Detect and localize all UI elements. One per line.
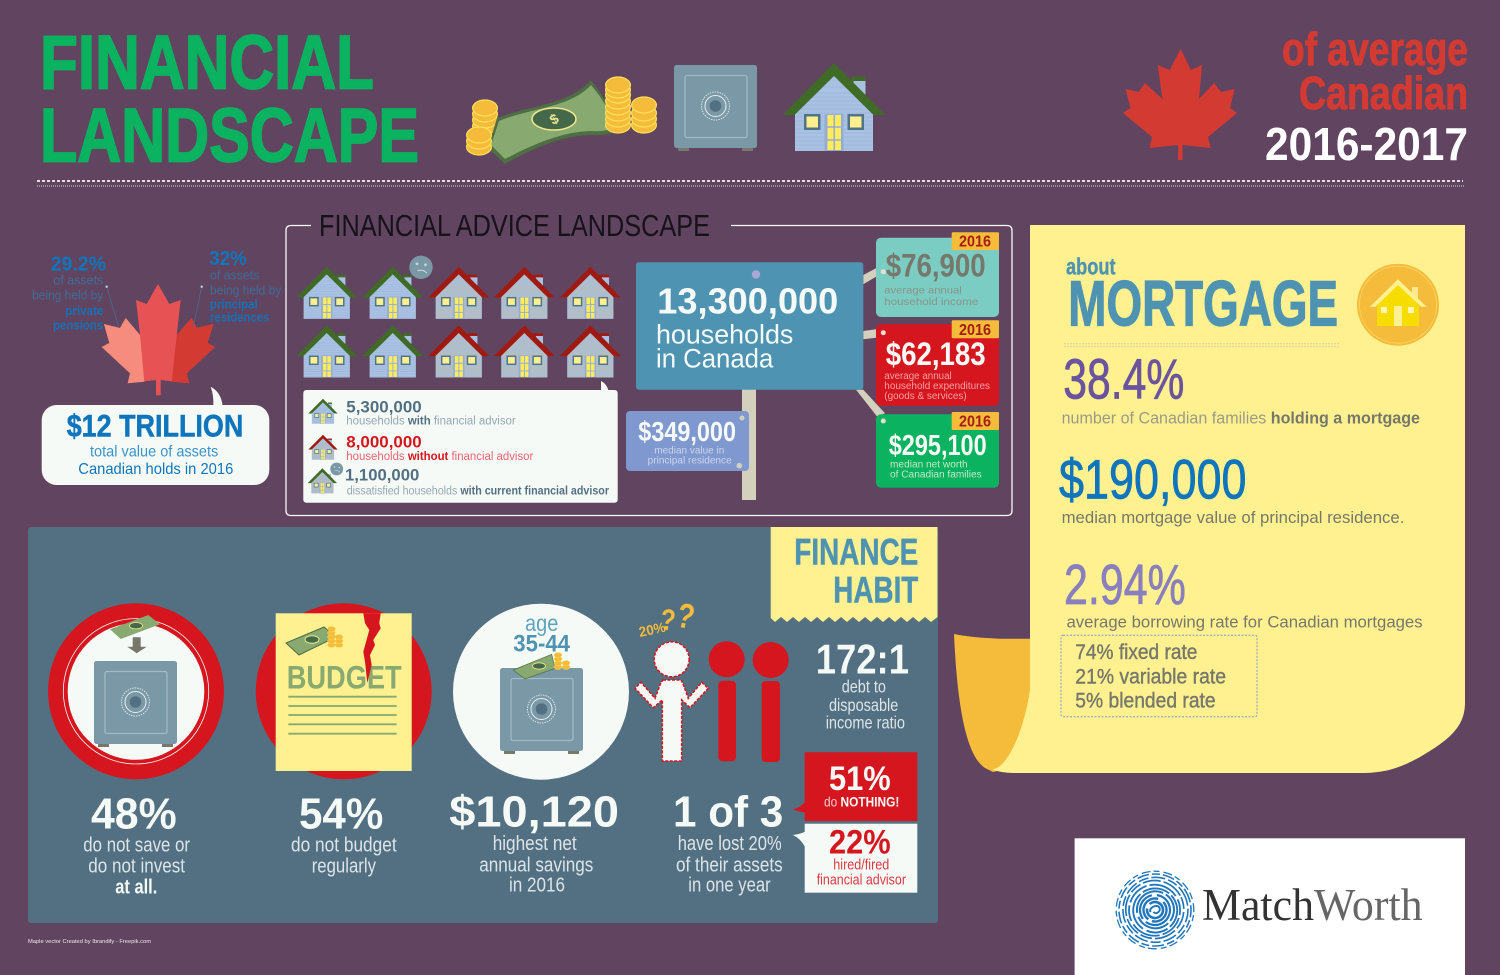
stat: do not budget: do not budget: [291, 835, 397, 857]
stat: private pensions: private: [65, 304, 103, 318]
heading tag: [771, 527, 938, 622]
stat: do not save: [48, 603, 224, 898]
stat: holding a mortgage: [1062, 347, 1420, 427]
sign: households: 13,300,000: [657, 280, 838, 321]
legend card: 8,000,000: [346, 433, 422, 452]
icon: house: [782, 63, 886, 151]
title: FINANCIAL: [40, 20, 374, 106]
sign: household expenditures: (goods & services): [884, 391, 967, 402]
sign: households: in Canada: [656, 344, 774, 374]
stat: do not save: do not save or: [83, 835, 190, 857]
heading tag: FINANCE: [794, 531, 918, 572]
icon: sad face: [409, 256, 433, 279]
stat: median mortgage: [1059, 447, 1404, 527]
stat: private pensions: [32, 254, 106, 332]
sign: net worth: of Canadian families: [890, 469, 982, 480]
panel: financial advice landscape: [286, 208, 1012, 516]
callout: hired or fired: hired/fired: [833, 856, 889, 873]
panel: assets: [32, 248, 282, 485]
callout: hired or fired: financial advisor: [817, 871, 906, 888]
stat: private pensions: being held by: [32, 288, 104, 302]
stat: debt ratio: 172:1: [816, 635, 909, 682]
sign: household expenditures: average annual: [884, 371, 952, 382]
stat: do not budget: BUDGET: [287, 659, 402, 695]
title: LANDSCAPE: [40, 94, 419, 178]
stat: holding a mortgage: number of Canadian families holding a mortgage: [1062, 408, 1420, 427]
icon: three people: [635, 596, 789, 762]
icon: three people: ?: [658, 603, 677, 638]
icon: three people: 20%: [637, 619, 668, 640]
sign: net worth: $295,100: [889, 430, 987, 462]
sign: household income: [876, 232, 999, 317]
stat: debt ratio: disposable: [829, 695, 898, 715]
stat: median mortgage: $190,000: [1059, 447, 1246, 510]
tri-colour maple leaf: [102, 284, 215, 395]
icon: money and coins: $: [547, 110, 562, 128]
callout: do nothing: do NOTHING!: [824, 794, 899, 810]
stat: one of three: [673, 788, 783, 897]
stat: one of three: of their assets: [676, 855, 783, 877]
legend card: dissatisfied households with current financial advisor: [347, 485, 609, 497]
heading: FINANCIAL ADVICE LANDSCAPE: [319, 208, 710, 243]
sign: household expenditures: household expenditures: [884, 381, 990, 392]
callout: 12 trillion: Canadian holds in 2016: [78, 461, 233, 478]
signpost connectors: [742, 268, 885, 500]
stat: do not budget: 54%: [299, 789, 383, 838]
stat: highest net savings: highest net: [493, 833, 577, 855]
rate breakdown box: [1061, 635, 1257, 717]
stat: debt ratio: income ratio: [826, 712, 905, 732]
house grid: [296, 267, 621, 377]
icon: three people: ?: [673, 596, 698, 637]
heading: about: [1066, 253, 1116, 279]
sign: household income: household income: [884, 296, 978, 308]
panel: about mortgage: [954, 225, 1465, 773]
stat: do not save: 48%: [91, 789, 177, 838]
panel: finance habit: [28, 527, 938, 923]
stat: highest net savings: in 2016: [509, 875, 565, 897]
stat: principal residences: [209, 248, 282, 325]
stat: do not budget: [256, 603, 432, 878]
sign: household expenditures: 2016: [959, 322, 991, 339]
callout: 12 trillion: [42, 387, 269, 485]
legend card: households without financial advisor: [346, 451, 533, 463]
logo: MatchWorth: [1075, 838, 1465, 975]
subtitle: [1265, 23, 1468, 170]
sign: net worth: [876, 412, 999, 488]
stat: private pensions: pensions: [53, 318, 103, 332]
sign: household income: average annual: [884, 284, 962, 296]
title: [40, 20, 419, 178]
credit line: Maple vector Created by Ibrandify - Freepik.com: [28, 939, 151, 945]
stat: debt ratio: [816, 635, 909, 732]
callout: hired or fired: 22%: [829, 823, 891, 861]
sign: household income: $76,900: [886, 248, 986, 284]
callout: do nothing: 51%: [829, 760, 891, 798]
callout: 12 trillion: $12 TRILLION: [67, 408, 243, 444]
stat: median mortgage: median mortgage value of principal residence.: [1062, 508, 1404, 527]
sign: net worth: 2016: [959, 413, 991, 430]
sign: household expenditures: $62,183: [886, 336, 986, 372]
stat: debt ratio: debt to: [842, 676, 886, 696]
sign: principal residence value: median value in: [654, 446, 724, 457]
stat: do not budget: regularly: [312, 856, 376, 878]
sign: principal residence value: principal residence: [648, 456, 732, 467]
icon: money and coins: [467, 77, 656, 164]
heading: [1064, 253, 1339, 347]
stat: highest net savings: age: [525, 610, 558, 636]
icon: safe: [674, 65, 757, 151]
icon: red maple leaf: [1123, 49, 1237, 160]
stat: one of three: have lost 20%: [678, 833, 782, 855]
legend card: 1,100,000: [345, 466, 419, 485]
stat: borrowing rate: [1064, 553, 1423, 631]
sign: households: [636, 262, 863, 390]
stat: principal residences: being held by: [210, 283, 282, 297]
stat: principal residences: 32%: [209, 248, 247, 270]
stat: borrowing rate: 2.94%: [1064, 553, 1186, 617]
stat: one of three: in one year: [688, 875, 771, 897]
stat: private pensions: 29.2%: [51, 254, 106, 276]
stat: highest net savings: annual savings: [479, 855, 593, 877]
sign: net worth: median net worth: [890, 459, 968, 470]
sign: principal residence value: [626, 411, 749, 471]
stat: highest net savings: [449, 604, 629, 897]
stat: one of three: 1 of 3: [673, 788, 783, 837]
legend card: 5,300,000: [346, 397, 422, 416]
sign: household expenditures: [876, 320, 999, 406]
stat: principal residences: residences: [210, 311, 269, 325]
rate breakdown box: 21% variable rate: [1075, 665, 1226, 688]
stat: do not save: at all.: [115, 876, 157, 898]
stat: highest net savings: 35-44: [513, 631, 571, 658]
heading tag: HABIT: [833, 569, 919, 610]
stat: borrowing rate: average borrowing rate for Canadian mortgages: [1066, 612, 1423, 631]
stat: principal residences: of assets: [210, 268, 259, 282]
legend card: households with financial advisor: [346, 415, 516, 427]
subtitle: 2016-2017: [1265, 118, 1468, 170]
callout: 12 trillion: total value of assets: [90, 444, 218, 461]
stat: private pensions: of assets: [53, 273, 103, 287]
logo: MatchWorth: Match: [1202, 880, 1314, 930]
stat: principal residences: principal: [210, 297, 258, 311]
stat: holding a mortgage: 38.4%: [1063, 347, 1184, 411]
sign: household income: 2016: [959, 234, 991, 251]
rate breakdown box: 74% fixed rate: [1075, 641, 1197, 664]
legend card: [303, 381, 618, 503]
stat: do not save: do not invest: [88, 856, 185, 878]
callout: do nothing: [793, 752, 917, 821]
sign: principal residence value: $349,000: [638, 416, 736, 447]
rate breakdown box: 5% blended rate: [1075, 689, 1216, 712]
icon: gold house badge: [1357, 264, 1439, 346]
callout: hired or fired: [793, 823, 917, 893]
sign: households: households: [656, 319, 793, 349]
subtitle: Canadian: [1299, 67, 1468, 119]
stat: highest net savings: $10,120: [449, 788, 619, 837]
logo: MatchWorth: Worth: [1314, 880, 1423, 930]
icon: fingerprint: [1103, 858, 1207, 962]
heading: MORTGAGE: [1068, 267, 1338, 339]
